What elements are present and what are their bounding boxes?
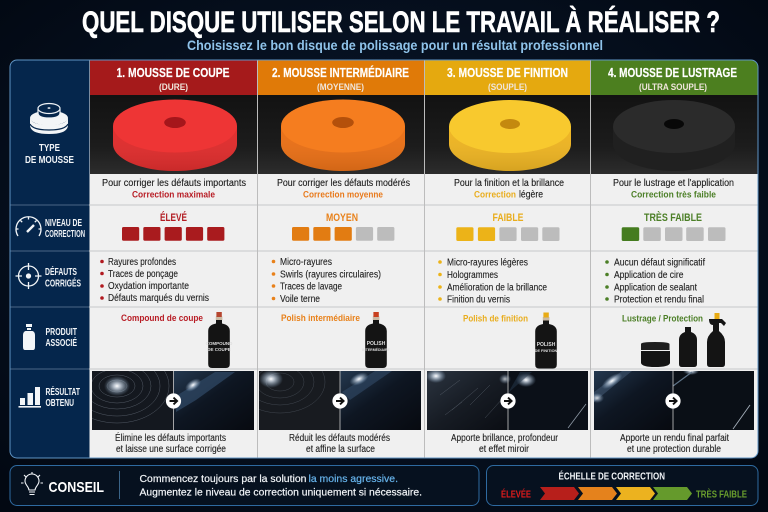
icon: foam pad stack bbox=[30, 104, 68, 134]
defects list column 3 bbox=[438, 258, 547, 306]
row label: résultat obtenu: RÉSULTAT bbox=[46, 385, 80, 398]
result caption 3 bbox=[451, 433, 559, 455]
defects list column 2: Traces de lavage bbox=[280, 282, 342, 292]
product column 3: DE FINITION bbox=[535, 349, 558, 353]
result caption 2: Réduit les défauts modérés bbox=[289, 433, 390, 444]
column 1 header: 1. MOUSSE DE COUPE bbox=[116, 65, 230, 80]
defects list column 1 bbox=[100, 257, 209, 304]
row label: type de mousse: DE MOUSSE bbox=[25, 155, 74, 166]
icon: bar chart bbox=[18, 387, 41, 408]
defects list column 1: Rayures profondes bbox=[108, 257, 176, 268]
row label: niveau de correction bbox=[16, 217, 85, 240]
column 3 header: 3. MOUSSE DE FINITION bbox=[447, 65, 568, 80]
defects list column 1: Défauts marqués du vernis bbox=[108, 293, 209, 304]
result caption 1: Élimine les défauts importants bbox=[115, 433, 226, 444]
product column 1 bbox=[121, 312, 233, 368]
description column 2: Correction moyenne bbox=[303, 190, 383, 200]
panel: échelle de correction: ÉLEVÉE bbox=[501, 488, 531, 500]
description column 4: Pour le lustrage et l'application bbox=[613, 178, 734, 189]
column 3 header bbox=[447, 65, 568, 93]
product column 3: POLISH bbox=[537, 342, 556, 348]
defects list column 4 bbox=[605, 258, 705, 306]
tip text: Commencez toujours par la solution bbox=[140, 473, 307, 485]
row label: type de mousse: TYPE bbox=[39, 143, 60, 154]
product column 1: Compound de coupe bbox=[121, 313, 203, 324]
panel: échelle de correction bbox=[486, 466, 758, 506]
icon: sealant bottle bbox=[679, 327, 697, 367]
row label: niveau de correction: CORRECTION bbox=[45, 229, 85, 240]
product column 1: COMPOUND bbox=[206, 341, 233, 346]
defects list column 1: Oxydation importante bbox=[108, 281, 189, 292]
yellow foam disc bbox=[449, 100, 571, 171]
result caption 3: Apporte brillance, profondeur bbox=[451, 433, 559, 444]
row label: produit associé: PRODUIT bbox=[46, 327, 77, 338]
defects list column 2: Voile terne bbox=[280, 294, 320, 305]
result caption 2: et affine la surface bbox=[306, 444, 375, 455]
red foam disc bbox=[113, 100, 237, 171]
description column 3 bbox=[454, 178, 564, 200]
result caption 3: et effet miroir bbox=[479, 444, 530, 455]
column 2 header: 2. MOUSSE INTERMÉDIAIRE bbox=[272, 65, 409, 80]
panel: conseil: CONSEIL bbox=[48, 479, 104, 496]
description column 3: Correction bbox=[474, 190, 516, 200]
level column 1: élevé bbox=[122, 211, 224, 241]
defects list column 2 bbox=[272, 257, 381, 305]
description column 3: légère bbox=[519, 190, 543, 200]
defects list column 4: Aucun défaut significatif bbox=[614, 258, 705, 268]
row label: résultat obtenu: OBTENU bbox=[46, 398, 74, 409]
product column 2: INTERMÉDIAIRE bbox=[362, 347, 390, 352]
orange foam disc bbox=[281, 100, 405, 171]
before/after photo 4 bbox=[590, 367, 754, 430]
tip text bbox=[140, 473, 422, 498]
column 1 header: (DURE) bbox=[159, 82, 188, 93]
row label: résultat obtenu bbox=[18, 385, 80, 409]
defects list column 4: Application de sealant bbox=[614, 282, 697, 294]
result caption 4: Apporte un rendu final parfait bbox=[620, 433, 729, 444]
result caption 1 bbox=[115, 433, 226, 455]
icon: spray bottle bbox=[707, 313, 726, 367]
defects list column 2: Micro-rayures bbox=[280, 257, 332, 268]
icon: wax jar bbox=[641, 342, 670, 367]
defects list column 4: Application de cire bbox=[614, 270, 684, 281]
result caption 2 bbox=[289, 433, 390, 455]
row label: défauts corrigés: DÉFAUTS bbox=[45, 265, 77, 278]
description column 1: Correction maximale bbox=[132, 190, 215, 200]
description column 1: Pour corriger les défauts importants bbox=[102, 178, 246, 189]
before/after photo 1 bbox=[92, 371, 254, 430]
tip text: Augmentez le niveau de correction uniquement si nécessaire. bbox=[140, 486, 422, 498]
defects list column 3: Hologrammes bbox=[447, 270, 498, 281]
column 2 header: (MOYENNE) bbox=[317, 82, 364, 93]
description column 4 bbox=[613, 178, 734, 200]
icon: light bulb bbox=[21, 472, 43, 494]
tip text: la moins agressive. bbox=[308, 473, 398, 485]
product column 4 bbox=[622, 313, 726, 367]
level column 2: moyen bbox=[292, 212, 394, 241]
product column 2: Polish intermédiaire bbox=[281, 313, 360, 324]
defects list column 1: Traces de ponçage bbox=[108, 269, 178, 280]
before/after photo 3 bbox=[426, 369, 588, 430]
product column 4: Lustrage / Protection bbox=[622, 314, 703, 324]
before/after photo 2 bbox=[259, 371, 421, 430]
description column 4: Correction très faible bbox=[631, 190, 716, 200]
defects list column 2: Swirls (rayures circulaires) bbox=[280, 270, 381, 280]
defects list column 3: Micro-rayures légères bbox=[447, 258, 528, 268]
level column 4: très faible bbox=[622, 211, 726, 241]
icon: bottle bbox=[23, 324, 35, 350]
column 3 header: (SOUPLE) bbox=[488, 82, 527, 93]
row label: défauts corrigés bbox=[16, 263, 81, 290]
panel: échelle de correction: TRÈS FAIBLE bbox=[696, 488, 747, 500]
panel: échelle de correction: ÉCHELLE DE CORRECTION bbox=[558, 470, 665, 482]
product column 3: Polish de finition bbox=[463, 314, 528, 324]
description column 3: Pour la finition et la brillance bbox=[454, 178, 564, 189]
scale chevrons bbox=[540, 487, 692, 500]
column 1 header bbox=[116, 65, 230, 93]
result caption 4: et une protection durable bbox=[627, 444, 721, 455]
level column 3: faible: FAIBLE bbox=[492, 212, 524, 224]
row label: niveau de correction: NIVEAU DE bbox=[45, 218, 82, 229]
product column 2: POLISH bbox=[367, 341, 386, 347]
product column 1: DE COUPE bbox=[207, 347, 231, 352]
row label: défauts corrigés: CORRIGÉS bbox=[45, 276, 81, 290]
defects list column 4: Protection et rendu final bbox=[614, 294, 704, 306]
level column 4: très faible: TRÈS FAIBLE bbox=[644, 211, 702, 224]
product column 2 bbox=[281, 312, 390, 368]
description column 1 bbox=[102, 178, 246, 200]
icon: gauge bbox=[16, 217, 41, 236]
column 2 header bbox=[272, 65, 409, 93]
icon: target bbox=[16, 263, 42, 289]
result caption 1: et laisse une surface corrigée bbox=[116, 444, 226, 455]
level column 3: faible bbox=[456, 212, 560, 241]
row label: produit associé bbox=[23, 324, 77, 350]
subtitle: Choisissez le bon disque de polissage pour un résultat professionnel bbox=[187, 38, 603, 53]
defects list column 3: Amélioration de la brillance bbox=[447, 282, 547, 294]
panel: conseil bbox=[10, 466, 479, 506]
level column 1: élevé: ÉLEVÉ bbox=[160, 211, 187, 224]
column 4 header: (ULTRA SOUPLE) bbox=[639, 82, 707, 93]
row label: produit associé: ASSOCIÉ bbox=[46, 336, 77, 349]
column 4 header bbox=[608, 65, 737, 93]
defects list column 3: Finition du vernis bbox=[447, 294, 510, 306]
level column 2: moyen: MOYEN bbox=[326, 212, 358, 224]
result caption 4 bbox=[620, 433, 729, 455]
product column 3 bbox=[463, 312, 558, 368]
comparison table bbox=[10, 60, 758, 458]
row label: type de mousse bbox=[25, 104, 74, 166]
description column 2: Pour corriger les défauts modérés bbox=[277, 178, 410, 189]
description column 2 bbox=[277, 178, 410, 200]
black foam disc bbox=[613, 100, 735, 171]
